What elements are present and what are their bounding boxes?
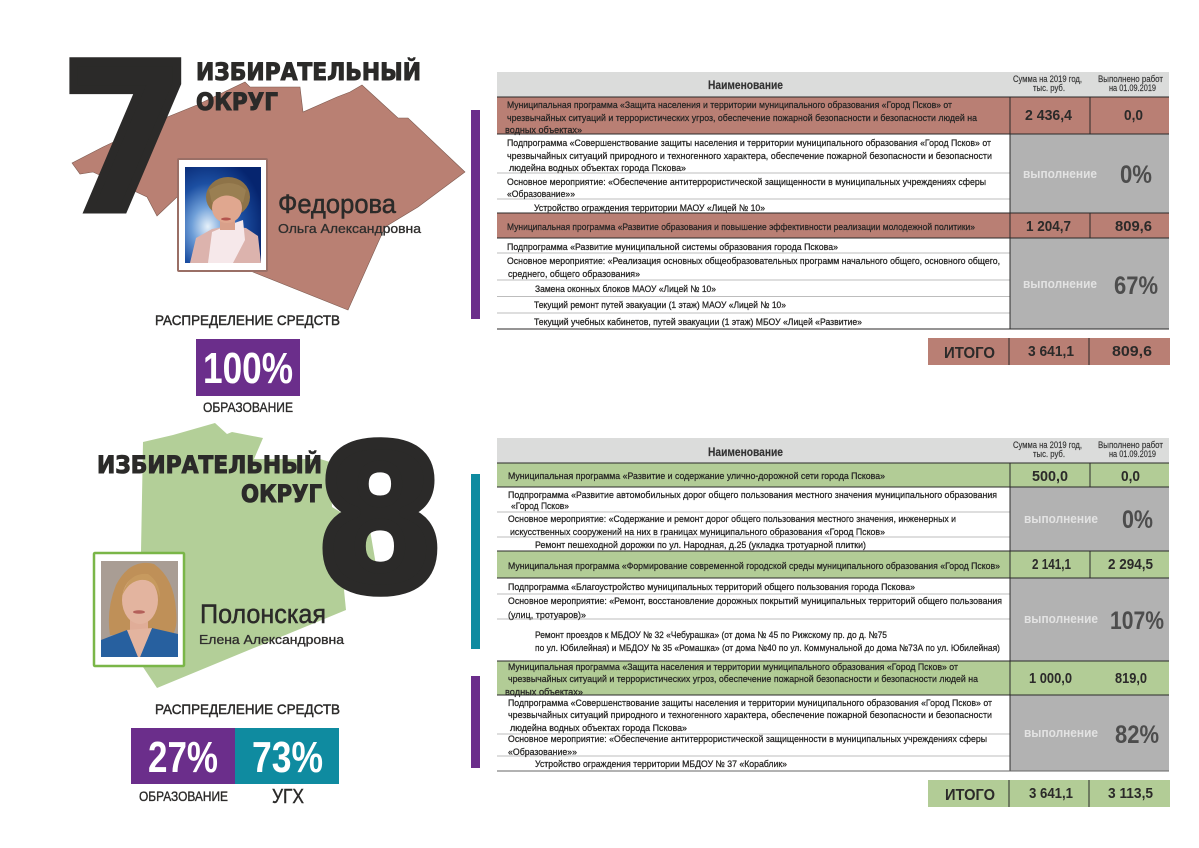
table values 8: 2 141,1 — [1032, 556, 1071, 573]
table text 8: Основное мероприятие: «Содержание и ремонт дорог общего пользования местного значения, инженерных и — [508, 514, 956, 525]
table values 8: 819,0 — [1115, 670, 1147, 687]
table text 8: Подпрограмма «Благоустройство муниципальных территорий общего пользования города Пскова» — [508, 582, 915, 593]
table text 7: Основное мероприятие: «Обеспечение антитеррористической защищенности в муниципальных учреждениях сферы — [507, 177, 986, 188]
table text 8: Ремонт проездов к МБДОУ № 32 «Чебурашка» (от дома № 45 по Рижскому пр. до д. №75 — [535, 630, 887, 641]
table values 7 — [1023, 107, 1158, 300]
name: Polonskaya: Елена Александровна — [199, 633, 344, 647]
total row 7: ИТОГО — [944, 345, 995, 362]
total row 7: 809,6 — [1112, 343, 1152, 360]
heading: district 7: ИЗБИРАТЕЛЬНЫЙ — [196, 57, 421, 86]
table values 8: 82% — [1115, 721, 1159, 749]
portrait: Fedorova — [178, 159, 267, 271]
table text 8: Основное мероприятие: «Обеспечение антитеррористической защищенности в муниципальных учреждениях сферы — [508, 734, 987, 745]
heading: district 7 — [196, 57, 421, 116]
table text 8: чрезвычайных ситуаций природного и техногенного характера, обеспечение пожарной безопасности и безопасности — [508, 710, 992, 721]
table: district 8 — [497, 438, 1169, 771]
table values 7: 0,0 — [1124, 107, 1143, 124]
table values 7: 67% — [1114, 272, 1158, 300]
table header 7: на 01.09.2019 — [1109, 83, 1156, 93]
table values 7: 809,6 — [1115, 218, 1152, 235]
table values 8: выполнение — [1024, 511, 1098, 526]
share block: education 27% — [131, 728, 235, 804]
table header 7: Сумма на 2019 год, — [1013, 74, 1082, 84]
table text 7: «Образование»» — [507, 189, 575, 200]
table text 7: чрезвычайных ситуаций природного и техногенного характера, обеспечение пожарной безопасности и безопасности — [507, 151, 992, 162]
share block: education 27%: 27% — [148, 733, 218, 782]
total row 8: ИТОГО — [945, 787, 995, 804]
share block: education 27%: ОБРАЗОВАНИЕ — [139, 789, 228, 804]
portrait: Polonskaya — [94, 553, 184, 666]
table text 8: искусственных сооружений на них в границах муниципального образования «Город Псков» — [510, 527, 885, 538]
share block: road infrastructure 73%: 73% — [252, 733, 323, 782]
marker bar: education 7 — [471, 110, 480, 319]
table text 8: чрезвычайных ситуаций и террористических угроз, обеспечение пожарной безопасности и безопасности людей на — [508, 674, 979, 685]
table text 8: (улиц, тротуаров)» — [508, 610, 586, 621]
table text 7: Основное мероприятие: «Реализация основных общеобразовательных программ начального общего, основного общего, — [507, 256, 1000, 267]
marker bar: education 8 — [471, 676, 480, 768]
table header 8: Выполнено работ — [1098, 440, 1163, 450]
label: funds distribution 8: РАСПРЕДЕЛЕНИЕ СРЕДСТВ — [155, 701, 340, 717]
share block: education 100%: 100% — [203, 344, 293, 393]
table text 8: Муниципальная программа «Развитие и содержание улично-дорожной сети города Пскова» — [508, 471, 885, 482]
table rows 8 — [497, 463, 1169, 771]
table header 7 — [497, 72, 1169, 97]
table text 8: по ул. Юбилейная) и МБДОУ № 35 «Ромашка» (от дома №40 по ул. Коммунальной до дома №73А по ул. Юбилейная) — [535, 643, 1000, 654]
table values 8: 1 000,0 — [1029, 670, 1072, 687]
table text 7: Устройство ограждения территории МАОУ «Лицей № 10» — [534, 203, 765, 214]
total row 8: 3 641,1 — [1029, 785, 1073, 802]
map: district 8 — [141, 423, 376, 688]
table text 7: Муниципальная программа «Защита населения и территории муниципального образования «Город Псков» от — [507, 100, 953, 111]
name: Fedorova: Федорова — [278, 189, 397, 219]
table values 8: 500,0 — [1032, 468, 1068, 485]
heading: district 8: ОКРУГ — [241, 480, 322, 508]
total row 8 — [928, 780, 1170, 807]
table values 7: 2 436,4 — [1025, 107, 1073, 124]
table header 8: тыс. руб. — [1033, 449, 1065, 459]
table values 8: 0% — [1122, 506, 1153, 534]
big number 7: 7 — [61, 21, 192, 257]
table values 8: выполнение — [1024, 725, 1098, 740]
table text 8: людейна водных объектах города Пскова» — [510, 723, 687, 734]
table values 8: 107% — [1110, 607, 1164, 635]
heading: district 8: ИЗБИРАТЕЛЬНЫЙ — [97, 450, 322, 479]
table text 8: Подпрограмма «Совершенствование защиты населения и территории муниципального образования «Город Псков» от — [508, 698, 993, 709]
name: Fedorova — [278, 189, 421, 236]
share block: road infrastructure 73%: УГХ — [272, 786, 304, 808]
table text 8: «Город Псков» — [511, 501, 569, 512]
table text 8: «Образование»» — [508, 747, 577, 758]
label: funds distribution 7: РАСПРЕДЕЛЕНИЕ СРЕДСТВ — [155, 312, 340, 328]
table header 7: Выполнено работ — [1098, 74, 1163, 84]
table text 7: Муниципальная программа «Развитие образования и повышение эффективности реализации молодежной политики» — [507, 222, 975, 233]
table header 8: Сумма на 2019 год, — [1013, 440, 1082, 450]
heading: district 7: ОКРУГ — [196, 88, 278, 116]
heading: district 8 — [97, 450, 322, 508]
table values 8: выполнение — [1024, 611, 1098, 626]
table values 7: выполнение — [1023, 276, 1097, 291]
total row 8: 3 113,5 — [1108, 785, 1153, 802]
table header 8 — [497, 438, 1169, 463]
share block: education 100% — [196, 339, 300, 415]
table header 8: на 01.09.2019 — [1109, 449, 1156, 459]
table rows 7 — [497, 97, 1169, 329]
map: district 7 — [72, 82, 465, 310]
table values 8 — [1024, 468, 1164, 749]
big number 8: 8 — [317, 407, 443, 634]
table text 7: людейна водных объектах города Пскова» — [509, 163, 686, 174]
table header 7: тыс. руб. — [1033, 83, 1065, 93]
table text 8: Муниципальная программа «Формирование современной городской среды муниципального образования «Город Псков» — [508, 561, 1000, 572]
share block: road infrastructure 73% — [235, 728, 339, 808]
name: Fedorova: Ольга Александровна — [278, 222, 421, 236]
table text 8: Ремонт пешеходной дорожки по ул. Народная, д.25 (укладка тротуарной плитки) — [535, 540, 866, 551]
table values 7: выполнение — [1023, 166, 1097, 181]
table: district 7 — [497, 72, 1169, 329]
table header 8: Наименование — [708, 445, 783, 459]
share block: education 100%: ОБРАЗОВАНИЕ — [203, 400, 293, 415]
table values 7: 0% — [1120, 161, 1152, 189]
table text 8 — [505, 471, 1002, 770]
total row 7: 3 641,1 — [1028, 343, 1074, 360]
table values 8: 2 294,5 — [1108, 556, 1153, 573]
table text 8: водных объектах» — [505, 687, 583, 698]
table text 7: чрезвычайных ситуаций и террористических угроз, обеспечение пожарной безопасности и безопасности людей на — [507, 113, 978, 124]
table text 7: среднего, общего образования» — [508, 269, 640, 280]
table values 8: 0,0 — [1121, 468, 1140, 485]
table header 7: Наименование — [708, 78, 783, 92]
table text 7 — [505, 100, 1000, 328]
total row 7 — [928, 338, 1170, 365]
table text 7: Подпрограмма «Совершенствование защиты населения и территории муниципального образования «Город Псков» от — [507, 138, 992, 149]
table text 7: водных объектах» — [505, 125, 582, 136]
table text 8: Основное мероприятие: «Ремонт, восстановление дорожных покрытий муниципальных территорий общего пользования — [508, 596, 1002, 607]
table values 7: 1 204,7 — [1026, 218, 1071, 235]
marker bar: road infrastructure 8 — [471, 474, 480, 649]
table text 8: Устройство ограждения территории МБДОУ № 37 «Кораблик» — [535, 759, 787, 770]
table text 8: Муниципальная программа «Защита населения и территории муниципального образования «Город Псков» от — [508, 662, 959, 673]
name: Polonskaya — [199, 599, 344, 647]
table text 7: Текущий ремонт путей эвакуации (1 этаж) МАОУ «Лицей № 10» — [534, 300, 786, 311]
table text 7: Замена оконных блоков МАОУ «Лицей № 10» — [535, 284, 716, 295]
name: Polonskaya: Полонская — [200, 599, 326, 629]
table text 7: Текущий учебных кабинетов, путей эвакуации (1 этаж) МБОУ «Лицей «Развитие» — [534, 317, 862, 328]
table text 7: Подпрограмма «Развитие муниципальной системы образования города Пскова» — [507, 242, 838, 253]
table text 8: Подпрограмма «Развитие автомобильных дорог общего пользования местного значения муниципального образования — [508, 490, 997, 501]
